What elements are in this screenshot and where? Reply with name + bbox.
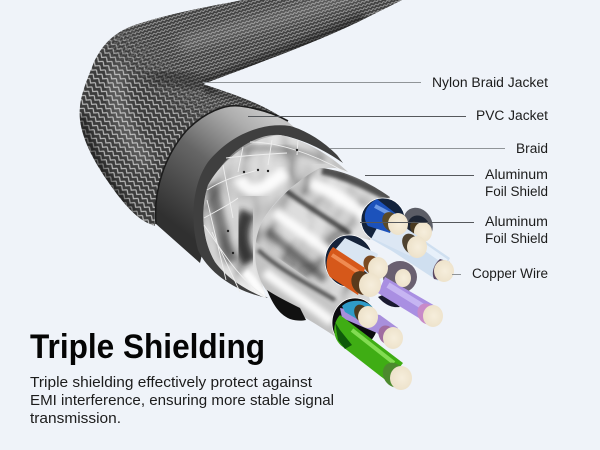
wire: small purple [340, 308, 403, 349]
wire: blue [365, 199, 408, 235]
title: Triple Shielding [30, 328, 265, 366]
description text: Triple shielding effectively protect against [30, 374, 313, 391]
braid rivets [227, 149, 298, 254]
aluminium foil under braid [203, 135, 348, 298]
leader lines [203, 82, 505, 274]
wire: pale blue [335, 238, 388, 279]
label: aluminum foil shield 1: Foil Shield [485, 184, 548, 199]
wire: rear wire in grey shield [397, 202, 439, 246]
label: aluminum foil shield 1 [485, 167, 548, 199]
foil shields: silver shielded tubes [255, 168, 390, 336]
description text: transmission. [30, 410, 121, 427]
label: copper wire: Copper Wire [472, 266, 548, 281]
description text [30, 374, 334, 427]
label: aluminum foil shield 1: Aluminum [485, 167, 548, 182]
description text: EMI interference, ensuring more stable signal [30, 392, 334, 409]
braid wires [204, 140, 345, 296]
label: pvc jacket: PVC Jacket [476, 108, 548, 123]
wire group: top bundle [361, 198, 454, 282]
wire group: bottom bundle [332, 298, 412, 392]
wire: pale blue copper wire [371, 226, 454, 282]
label: aluminum foil shield 2: Aluminum [485, 214, 548, 229]
wire: green [334, 315, 412, 392]
wire group: centre bundle [325, 235, 443, 328]
label: aluminum foil shield 2: Foil Shield [485, 231, 548, 246]
nylon braid jacket [80, 0, 402, 226]
labels [432, 75, 548, 281]
wire: purple [378, 261, 443, 328]
label: aluminum foil shield 2 [485, 214, 548, 246]
pvc jacket [155, 105, 295, 263]
foil shadow beneath lower tube [267, 290, 306, 321]
illustration: braided cable cross-section [80, 0, 454, 390]
label: nylon braid jacket: Nylon Braid Jacket [432, 75, 548, 90]
pvc jacket: end ring [193, 125, 343, 298]
wire: orange [327, 247, 381, 299]
label: braid: Braid [516, 141, 548, 156]
pvc jacket: dark seam under nylon [156, 106, 288, 224]
wire: teal [342, 301, 378, 328]
wire: white [372, 228, 427, 258]
